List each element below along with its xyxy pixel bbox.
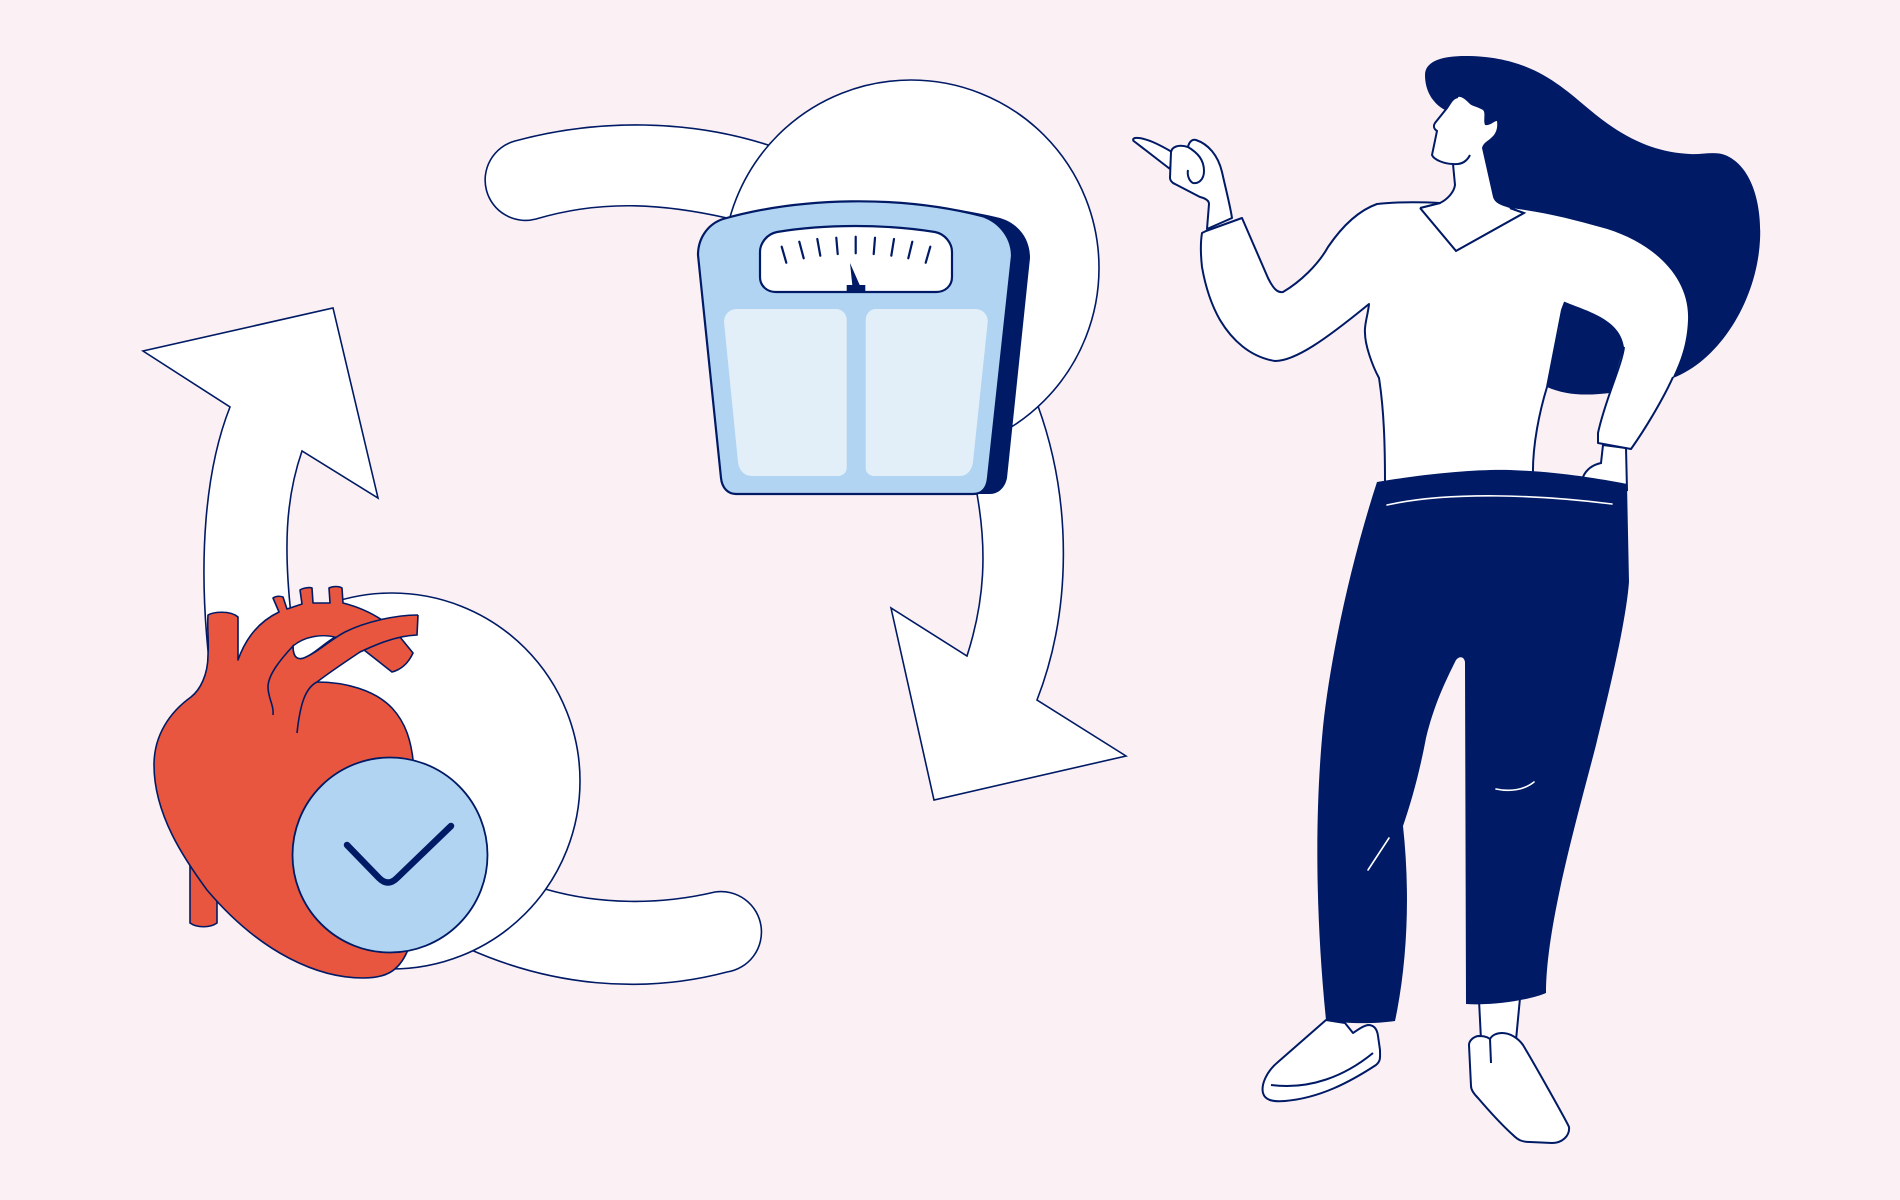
trousers detail lines <box>1368 496 1612 870</box>
arrow: bottom tail leading from heart circle <box>469 889 761 984</box>
heart front pulmonary artery <box>268 615 418 733</box>
woman right shoe <box>1469 1033 1569 1143</box>
circle: behind scale <box>723 80 1099 456</box>
arrow: left arrow pointing up <box>143 308 378 670</box>
icon: bathroom scale <box>698 201 1030 494</box>
scale right foot pad <box>866 309 988 476</box>
figure: woman in oversized trousers <box>1133 56 1760 1143</box>
woman hand on hip <box>1583 445 1627 490</box>
circle: behind heart <box>204 593 580 969</box>
woman hair <box>1425 56 1760 378</box>
woman collar <box>1420 208 1524 251</box>
woman trousers <box>1317 470 1629 1023</box>
scale body <box>698 201 1012 494</box>
woman raised hand <box>1133 138 1232 229</box>
woman sweater <box>1201 202 1688 483</box>
heart opening between vessels <box>293 636 335 659</box>
arrow: right arrow pointing down <box>891 406 1126 800</box>
heart main shape <box>154 586 420 978</box>
heart rear pulmonary arch <box>340 615 413 672</box>
heart artery outlines <box>268 615 418 733</box>
woman hair behind elbow <box>1547 302 1624 395</box>
scale back shadow <box>850 201 1030 494</box>
check circle <box>292 758 488 952</box>
woman left shoe <box>1263 1020 1380 1101</box>
arrow: top tail leading to scale circle <box>485 125 800 250</box>
woman right ankle <box>1479 998 1520 1040</box>
heart lower vessel <box>190 865 217 927</box>
scale left foot pad <box>724 309 847 476</box>
woman face and neck <box>1420 97 1524 251</box>
check mark <box>347 826 451 882</box>
icon: heart with check mark <box>154 586 488 978</box>
woman sweater outline <box>1201 202 1673 483</box>
scale dial <box>760 226 952 292</box>
